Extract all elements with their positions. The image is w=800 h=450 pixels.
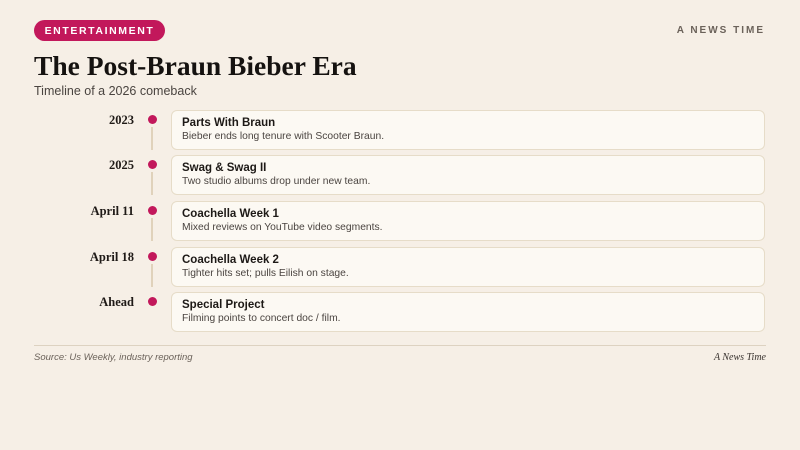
card: swag: Swag & Swag II bbox=[182, 162, 266, 174]
timeline row 2023: 2023 bbox=[109, 113, 134, 127]
title: The Post-Braun Bieber Era bbox=[34, 50, 357, 81]
card: coachella week 2: Coachella Week 2 bbox=[182, 254, 279, 266]
card: swag: Two studio albums drop under new team. bbox=[182, 176, 370, 187]
timeline row 2023 bbox=[109, 110, 765, 150]
card: swag bbox=[171, 155, 765, 195]
card: special project bbox=[171, 292, 765, 332]
timeline row 2025 bbox=[109, 155, 765, 195]
subtitle: Timeline of a 2026 comeback bbox=[34, 84, 197, 98]
tag: entertainment: ENTERTAINMENT bbox=[45, 25, 154, 37]
timeline row april 11: April 11 bbox=[91, 204, 134, 218]
card: special project: Filming points to concert doc / film. bbox=[182, 313, 341, 324]
brand: A NEWS TIME bbox=[677, 25, 765, 36]
card: parts with braun bbox=[171, 110, 765, 150]
card: coachella week 1 bbox=[171, 201, 765, 241]
timeline row april 18: April 18 bbox=[90, 250, 134, 264]
timeline row ahead: Ahead bbox=[99, 295, 134, 309]
tag: entertainment bbox=[34, 20, 165, 41]
timeline row april 18 bbox=[90, 247, 765, 287]
card: coachella week 2 bbox=[171, 247, 765, 287]
byline: A News Time bbox=[714, 352, 766, 363]
card: special project: Special Project bbox=[182, 299, 264, 311]
source: Source: Us Weekly, industry reporting bbox=[34, 352, 193, 363]
card: coachella week 1: Mixed reviews on YouTube video segments. bbox=[182, 222, 383, 233]
card: parts with braun: Bieber ends long tenure with Scooter Braun. bbox=[182, 131, 384, 142]
card: coachella week 1: Coachella Week 1 bbox=[182, 208, 279, 220]
card: parts with braun: Parts With Braun bbox=[182, 117, 275, 129]
timeline row 2025: 2025 bbox=[109, 158, 134, 172]
timeline row april 11 bbox=[90, 201, 765, 241]
card: coachella week 2: Tighter hits set; pulls Eilish on stage. bbox=[182, 268, 349, 279]
timeline row ahead bbox=[99, 292, 765, 332]
